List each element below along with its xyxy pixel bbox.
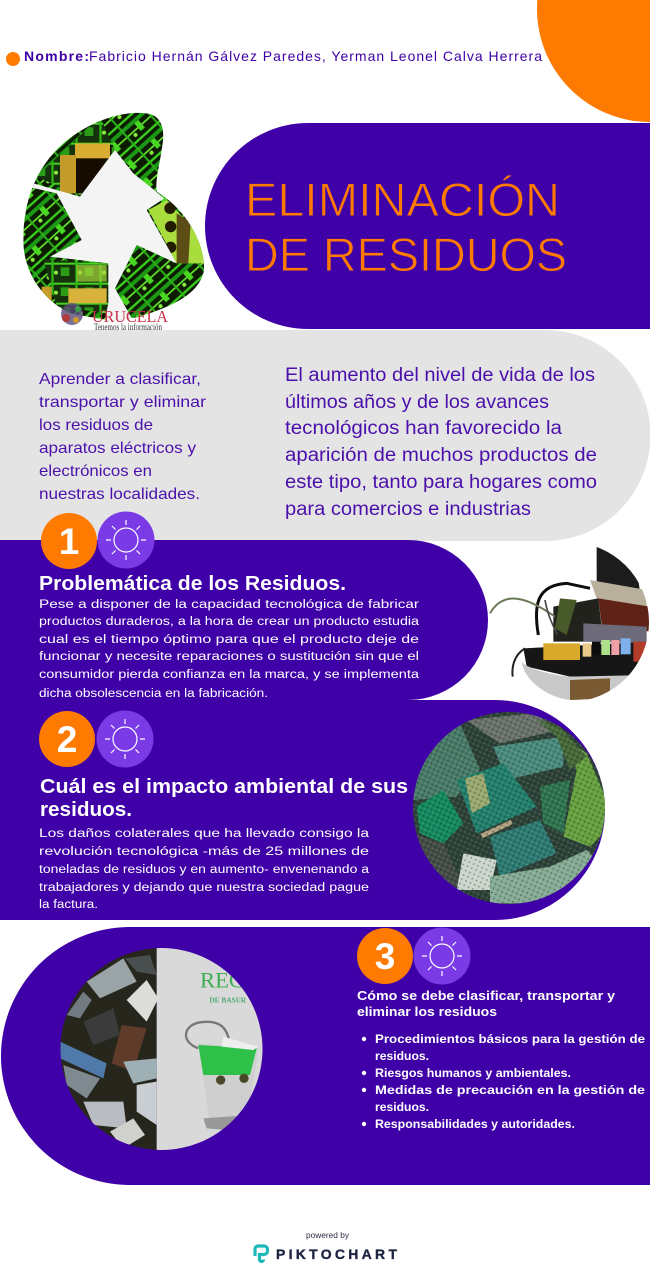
badge: number 1 [41,513,97,569]
image: old phones and recycling mascot: REC [200,968,244,993]
section 1 body text: Pese a disponer de la capacidad tecnológica de fabricar [39,599,419,611]
icon: sun 3 [414,928,470,984]
image: pile of circuit boards [410,710,610,910]
icon: sun 1 [98,512,154,568]
text block: objective: aparatos eléctricos y [39,440,196,457]
panel: title background [205,123,650,329]
text block: objective [39,371,207,503]
title: DE RESIDUOS [245,228,567,281]
recycling arrows negative space [31,150,177,324]
section 3 bullet list [362,1034,645,1131]
section 3 bullet list: residuos. [375,1102,429,1114]
text block: objective: Aprender a clasificar, [39,371,201,388]
section 1 body text: productos duraderos, a la hora de crear un producto estudia [39,616,420,628]
text block: introduction: El aumento del nivel de vida de los [285,365,595,386]
section 3 heading: eliminar los residuos [357,1004,497,1019]
panel: section 1 background [0,540,488,700]
title: ELIMINACIÓN [245,173,560,226]
text block: introduction: últimos años y de los avances [285,392,549,413]
title [245,173,567,281]
author line: Nombre: [24,48,89,64]
right circuit piece [148,200,204,263]
section 3 heading [357,988,616,1019]
text block: introduction [285,365,597,520]
section 3 bullet list: Responsabilidades y autoridades. [375,1119,575,1131]
badge: number 2 [39,711,95,767]
section 2 body text: toneladas de residuos y en aumento- envenenando a [39,864,370,876]
section 3 heading: Cómo se debe clasificar, transportar y [357,988,616,1003]
image: recycling symbol with circuit board [23,112,204,321]
section 2 heading [40,776,408,821]
text block: objective: electrónicos en [39,463,152,480]
decorative orange corner circle [537,0,650,122]
section 1 heading: Problemática de los Residuos. [39,573,346,595]
footer: Piktochart branding: powered by [306,1230,350,1240]
section 1 body text: dicha obsolescencia en la fabricación. [39,688,268,700]
logo: Urucela: URUCELA [92,307,169,326]
section 3 bullet list: Medidas de precaución en la gestión de [375,1085,645,1097]
image: old phones and recycling mascot [57,945,267,1152]
badge: number 3: 3 [375,936,395,977]
section 2 body text: trabajadores y dejando que nuestra sociedad pague [39,882,369,894]
section 2 heading: Cuál es el impacto ambiental de sus [40,776,408,798]
text block: introduction: aparición de muchos productos de [285,445,597,466]
section 2 heading: residuos. [40,799,132,821]
text block: introduction: para comercios e industrias [285,499,531,520]
section 1 body text: consumidor pierda confianza en la marca, y se implementa [39,669,420,681]
section 2 body text [39,828,370,911]
section 1 body text: cual es el tiempo óptimo para que el producto deje de [39,634,419,646]
section 2 body text: la factura. [39,899,98,911]
logo: Urucela [61,303,169,332]
panel: section 2 background [0,700,605,920]
text block: objective: nuestras localidades. [39,486,200,503]
image: disassembled electronics [490,547,649,700]
badge: number 2: 2 [57,719,77,760]
footer: Piktochart branding: PIKTOCHART [276,1246,397,1262]
top-left circuit piece [37,117,115,197]
section 3 bullet list: Riesgos humanos y ambientales. [375,1068,571,1080]
text block: introduction: este tipo, tanto para hogares como [285,472,597,493]
text block: introduction: tecnológicos han favorecido la [285,418,562,439]
logo: Urucela: Tenemos la información [94,322,162,332]
bottom-left circuit piece [43,259,108,313]
text block: objective: los residuos de [39,417,153,434]
text block: objective: transportar y eliminar [39,394,207,411]
badge: number 3 [357,928,413,984]
panel: section 3 background [1,927,650,1185]
panel: grey intro [0,330,650,541]
section 1 body text [39,599,420,700]
author line: Fabricio Hernán Gálvez Paredes, Yerman Leonel Calva Herrera [89,48,542,64]
section 1 body text: funcionar y necesite reparaciones o sustitución sin que el [39,651,419,663]
icon: sun 2 [96,710,154,768]
image: old phones and recycling mascot: DE BASUR [209,995,247,1004]
section 3 bullet list: Procedimientos básicos para la gestión de [375,1034,645,1046]
section 2 body text: Los daños colaterales que ha llevado consigo la [39,828,370,840]
section 3 bullet list: residuos. [375,1051,429,1063]
footer: Piktochart branding [255,1230,397,1262]
section 2 body text: revolución tecnológica -más de 25 millones de [39,846,369,858]
badge: number 1: 1 [59,521,79,562]
